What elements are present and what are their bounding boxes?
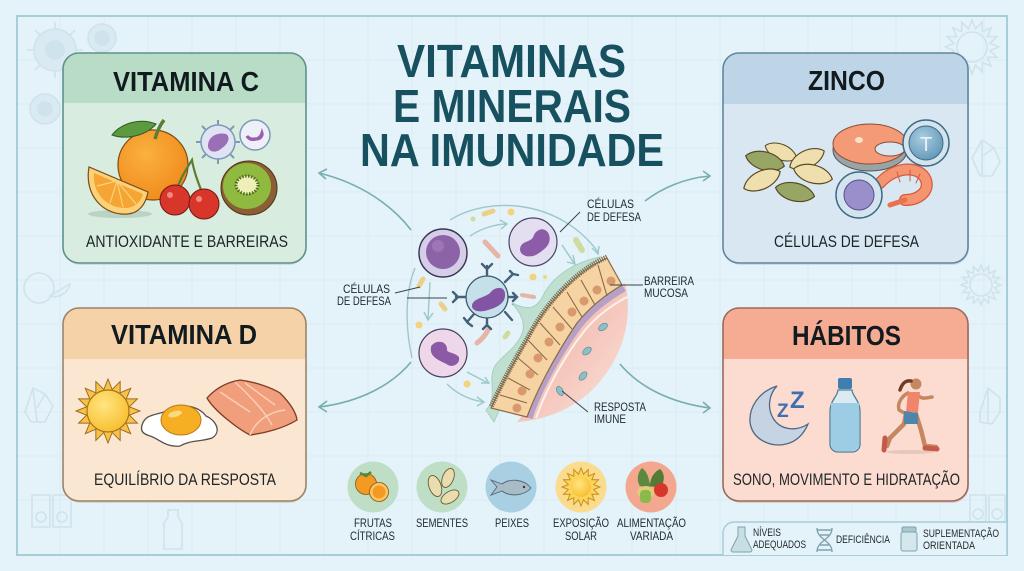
label: barreira mucosa bbox=[610, 274, 694, 300]
arrow: to hábitos bbox=[620, 364, 710, 413]
food icon: frutas cítricas: FRUTAS bbox=[354, 516, 392, 530]
cell dividers bbox=[500, 265, 607, 403]
icon: orange bbox=[88, 120, 188, 218]
label: resposta imune: RESPOSTA bbox=[594, 400, 646, 414]
food icon: sementes bbox=[416, 462, 468, 530]
cell: neutrophil top bbox=[509, 218, 557, 266]
label: células de defesa top: CÉLULAS bbox=[587, 196, 634, 211]
legend: suplementação orientada: SUPLEMENTAÇÃO bbox=[923, 527, 999, 540]
food icon: peixes: PEIXES bbox=[495, 516, 529, 530]
label: resposta imune: IMUNE bbox=[594, 412, 626, 426]
icon: water bottle bbox=[830, 378, 860, 452]
icon: sun bbox=[76, 379, 140, 443]
icon: salmon steak bbox=[833, 124, 907, 171]
legend: níveis adequados bbox=[731, 526, 806, 552]
caption: vitamina D: EQUILÍBRIO DA RESPOSTA bbox=[94, 470, 277, 489]
particles bbox=[416, 208, 582, 388]
food icon: exposição solar: SOLAR bbox=[565, 529, 597, 543]
icon: kiwi bbox=[221, 161, 277, 215]
food icon: alimentação variada bbox=[617, 462, 686, 543]
caption: hábitos: SONO, MOVIMENTO E HIDRATAÇÃO bbox=[733, 470, 960, 489]
legend bbox=[723, 522, 1007, 555]
connective tissue bbox=[517, 283, 628, 422]
nuclei bbox=[512, 276, 616, 412]
panel: vitamina C bbox=[63, 53, 306, 265]
purple layer bbox=[529, 288, 624, 418]
food icon: exposição solar: EXPOSIÇÃO bbox=[553, 516, 609, 530]
title bbox=[360, 35, 664, 176]
legend: níveis adequados: NÍVEIS bbox=[753, 526, 781, 539]
label: células de defesa left bbox=[337, 281, 447, 308]
blue cells in tissue bbox=[555, 322, 609, 397]
heading: vitamina C: VITAMINA C bbox=[113, 66, 259, 97]
icon: T cell bbox=[903, 120, 949, 166]
mucus layer bbox=[486, 257, 600, 422]
caption: vitamina C: ANTIOXIDANTE E BARREIRAS bbox=[86, 232, 288, 251]
icon: moon and Zs: Z bbox=[790, 387, 805, 414]
arrow: to vitamina D bbox=[319, 362, 411, 412]
heading: zinco: ZINCO bbox=[808, 65, 885, 96]
label: células de defesa left: DE DEFESA bbox=[337, 294, 391, 308]
food icon: frutas cítricas: CÍTRICAS bbox=[350, 528, 395, 543]
legend: deficiência bbox=[817, 528, 891, 552]
icon: fried egg bbox=[141, 405, 217, 446]
cell: neutrophil bottom bbox=[419, 329, 467, 377]
food icon: exposição solar bbox=[553, 462, 609, 543]
panel: vitamina D bbox=[63, 308, 306, 503]
food icon: frutas cítricas bbox=[348, 462, 398, 543]
legend: deficiência: DEFICIÊNCIA bbox=[836, 533, 891, 546]
epithelial cells bbox=[491, 258, 622, 417]
icon: shrimp bbox=[880, 169, 927, 205]
title: VITAMINAS bbox=[397, 35, 626, 87]
icon: defense cell bbox=[836, 172, 882, 218]
cell: macrophage center bbox=[453, 264, 518, 329]
heading: vitamina D: VITAMINA D bbox=[111, 319, 257, 350]
title: E MINERAIS bbox=[393, 80, 631, 132]
faint circular outline and small arrows bbox=[407, 205, 599, 406]
label: barreira mucosa: BARREIRA bbox=[644, 274, 694, 288]
food icon: sementes: SEMENTES bbox=[416, 516, 468, 530]
icon: pumpkin seeds bbox=[740, 139, 835, 205]
label: células de defesa left: CÉLULAS bbox=[343, 281, 390, 296]
heading: hábitos: HÁBITOS bbox=[792, 320, 901, 351]
title: NA IMUNIDADE bbox=[360, 124, 664, 176]
legend: níveis adequados: ADEQUADOS bbox=[753, 539, 806, 551]
icon: immune cells bbox=[196, 120, 270, 164]
food icon: alimentação variada: ALIMENTAÇÃO bbox=[617, 516, 686, 530]
label: resposta imune bbox=[562, 391, 646, 426]
food icon: peixes bbox=[486, 462, 536, 530]
icon: salmon fillet bbox=[207, 380, 297, 435]
icon: cherries bbox=[160, 160, 219, 219]
label: células de defesa top: DE DEFESA bbox=[587, 210, 641, 224]
central diagram: immune cells and mucosal barrier bbox=[337, 196, 694, 426]
food icon: alimentação variada: VARIADA bbox=[630, 529, 673, 543]
icon: moon and Zs bbox=[750, 386, 808, 445]
icon: moon and Zs: Z bbox=[777, 401, 789, 422]
icon: orange slice bbox=[88, 167, 148, 214]
arrow: to zinco bbox=[645, 171, 710, 201]
label: células de defesa top bbox=[560, 196, 641, 232]
icon: runner bbox=[884, 378, 937, 454]
brush border bbox=[491, 257, 607, 407]
label: barreira mucosa: MUCOSA bbox=[644, 286, 688, 300]
legend: suplementação orientada bbox=[901, 527, 999, 552]
caption: zinco: CÉLULAS DE DEFESA bbox=[774, 232, 920, 251]
legend: suplementação orientada: ORIENTADA bbox=[923, 540, 976, 552]
icon: T cell: T bbox=[920, 134, 932, 156]
panel: zinco bbox=[723, 53, 969, 265]
panel: hábitos bbox=[723, 308, 969, 503]
cell: lymphocyte bbox=[419, 229, 467, 277]
arrow: to vitamina C bbox=[319, 169, 411, 230]
